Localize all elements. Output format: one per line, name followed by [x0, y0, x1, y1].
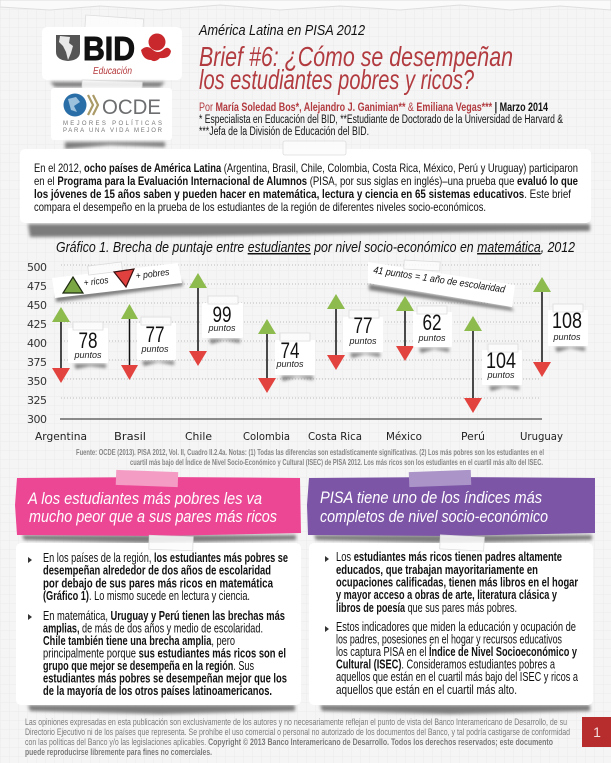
legend: + pobres [135, 267, 170, 282]
panel: left text [16, 535, 301, 714]
chart [27, 260, 588, 443]
value card: Chile 99: 99 [212, 302, 232, 327]
OCDE tagline: MEJORES POLÍTICAS [63, 120, 162, 127]
panel: purple heading [307, 470, 595, 543]
OCDE wordmark: OCDE [102, 96, 161, 119]
icon: OCDE chevrons [88, 95, 98, 115]
arrow: Brasil [121, 304, 138, 380]
affiliations: ***Jefa de la División de Educación del BID. [199, 126, 369, 138]
legend: + ricos [83, 275, 109, 289]
chart title: Gráfico 1. Brecha de puntaje entre estudiantes por nivel socio-económico en matemática, 2012 [56, 239, 576, 256]
country labels: México [386, 430, 422, 443]
icon: OCDE globe [64, 94, 86, 116]
value card: Perú 104 [482, 344, 522, 391]
logo shadow [50, 82, 165, 87]
main title [199, 41, 513, 95]
logo shadow lower [65, 142, 165, 149]
authors: Por María Soledad Bos*, Alejandro J. Ganimian** & Emiliana Vegas*** | Marzo 2014 [199, 102, 548, 114]
value card: Chile 99 [202, 296, 243, 344]
country labels: Argentina [35, 430, 87, 443]
value card: Colombia 74: 74 [280, 338, 300, 363]
value card: Costa Rica 77: 77 [354, 313, 372, 338]
bullet text: En matemática, Uruguay y Perú tienen las brechas más [43, 609, 285, 623]
y axis labels: 300 [27, 413, 47, 426]
country labels: Uruguay [520, 430, 563, 443]
country labels: Costa Rica [308, 430, 362, 443]
purple heading text: completos de nivel socio-económico [320, 507, 548, 526]
page number [582, 717, 611, 747]
pink heading text: A los estudiantes más pobres les va [27, 489, 262, 508]
country labels: Brasil [114, 430, 146, 443]
arrow: Argentina [52, 307, 70, 383]
country labels: Perú [461, 430, 485, 443]
value card: Colombia 74: puntos [275, 359, 304, 369]
main title: Brief #6: ¿Cómo se desempeñan [199, 41, 513, 72]
y axis labels: 450 [27, 299, 47, 312]
bullet text: libros de poesía que sus pares más pobres. [336, 601, 517, 615]
value card: Chile 99: puntos [207, 323, 236, 333]
y axis labels: 500 [27, 261, 47, 274]
bullet text: por debajo de sus pares más ricos en matemática [43, 576, 274, 590]
value card: Perú 104: puntos [486, 370, 515, 380]
value card: Uruguay 108 [548, 304, 588, 352]
arrow: Perú [464, 316, 482, 413]
header block [198, 22, 563, 138]
bullet text: (Gráfico 1). Lo mismo sucede en lectura y ciencia. [43, 589, 250, 603]
logo card: OCDE [51, 80, 172, 140]
affiliations [199, 114, 563, 138]
logo card: BID [42, 15, 182, 80]
value card: Brasil 77: 77 [146, 322, 164, 347]
bullet text: amplias, de más de dos años y medio de escolaridad. [43, 622, 263, 636]
OCDE tagline: PARA UNA VIDA MEJOR [63, 128, 163, 134]
value card: Uruguay 108: puntos [552, 332, 581, 342]
bullet text: principalmente porque sus estudiantes más ricos son el [43, 646, 286, 660]
bullet text: grupo que mejor se desempeña en la región. Sus [43, 659, 254, 673]
arrow: Uruguay [533, 277, 551, 377]
series label: América Latina en PISA 2012 [198, 22, 366, 39]
value card: Costa Rica 77 [343, 310, 383, 358]
bullet text: Chile también tiene una brecha amplia, pero [43, 634, 235, 648]
value card: México 62: puntos [417, 333, 446, 343]
bullet text [43, 551, 288, 698]
value card: Colombia 74 [275, 333, 315, 381]
icon: red BID Educación symbol [141, 34, 171, 61]
value card: Perú 104: 104 [486, 348, 516, 373]
y axis labels: 375 [27, 356, 47, 369]
value card: Brasil 77 [137, 317, 176, 366]
pink heading text: mucho peor que a sus pares más ricos [29, 507, 277, 526]
bullet text: aquellos que están en el cuartil más alto. [336, 683, 517, 697]
y axis labels: 350 [27, 375, 47, 388]
footer disclaimer [25, 717, 570, 757]
y axis labels: 425 [27, 318, 47, 331]
bullet text: Cultural (ISEC). Consideramos estudiantes pobres a [336, 658, 555, 672]
callout: 41 puntos: 41 puntos = 1 año de escolaridad [373, 265, 506, 296]
pink heading text [27, 489, 277, 526]
intro text [34, 161, 578, 214]
arrow: Costa Rica [327, 294, 345, 370]
panel: pink heading [15, 470, 301, 543]
arrow: Chile [189, 273, 207, 366]
label: Educación: Educación [93, 66, 132, 77]
value card: Costa Rica 77: puntos [348, 336, 377, 346]
bullet text: desempeñan alrededor de dos años de escolaridad [43, 564, 271, 578]
footer disclaimer: puede reproducirse libremente para fines no comerciales. [25, 747, 212, 757]
country labels [35, 430, 563, 443]
bullet text [336, 550, 578, 697]
panel: right text [309, 535, 593, 714]
bullet markers [325, 556, 329, 632]
intro text: compara el desempeño en la prueba de los estudiantes de la región de diferentes niveles socio-económicos. [34, 200, 486, 214]
BID wordmark: BID [83, 30, 135, 67]
country labels: Colombia [243, 430, 290, 443]
purple heading text: PISA tiene uno de los índices más [320, 488, 542, 507]
chart source note [76, 447, 544, 467]
bullet text: estudiantes más pobres se desempeñan mejor que los [43, 672, 287, 686]
y axis labels: 475 [27, 280, 47, 293]
y axis labels: 400 [27, 337, 47, 350]
icon: BID globe [56, 35, 80, 61]
intro panel [20, 141, 591, 237]
value card: Brasil 77: puntos [140, 344, 169, 354]
intro text: en el Programa para la Evaluación Internacional de Alumnos (PISA, por sus siglas en inglés)–una prueba que evaluó lo que [34, 174, 578, 188]
page number: 1 [593, 724, 601, 740]
purple heading text [320, 488, 548, 526]
legend [52, 262, 183, 302]
arrow: México [396, 296, 414, 361]
bullet markers [28, 557, 32, 620]
main title: los estudiantes pobres y ricos? [199, 64, 474, 95]
y axis labels: 325 [27, 394, 47, 407]
value card: Argentina 78: 78 [78, 328, 98, 353]
bullet text: de la mayoría de los otros países latinoamericanos. [43, 684, 272, 698]
arrow: Colombia [258, 319, 276, 393]
y axis labels [27, 261, 47, 426]
value card: Argentina 78: puntos [73, 350, 102, 360]
bullet text: educados, que trabajan mayoritariamente en [336, 563, 538, 577]
value card: México 62: 62 [422, 310, 442, 335]
bullet text: En los países de la región, los estudiantes más pobres se [43, 551, 288, 565]
country labels: Chile [185, 430, 212, 443]
value card: México 62 [413, 306, 452, 353]
value card: Argentina 78 [68, 322, 108, 369]
callout: 41 puntos [368, 260, 515, 311]
value card: Uruguay 108: 108 [552, 308, 582, 333]
